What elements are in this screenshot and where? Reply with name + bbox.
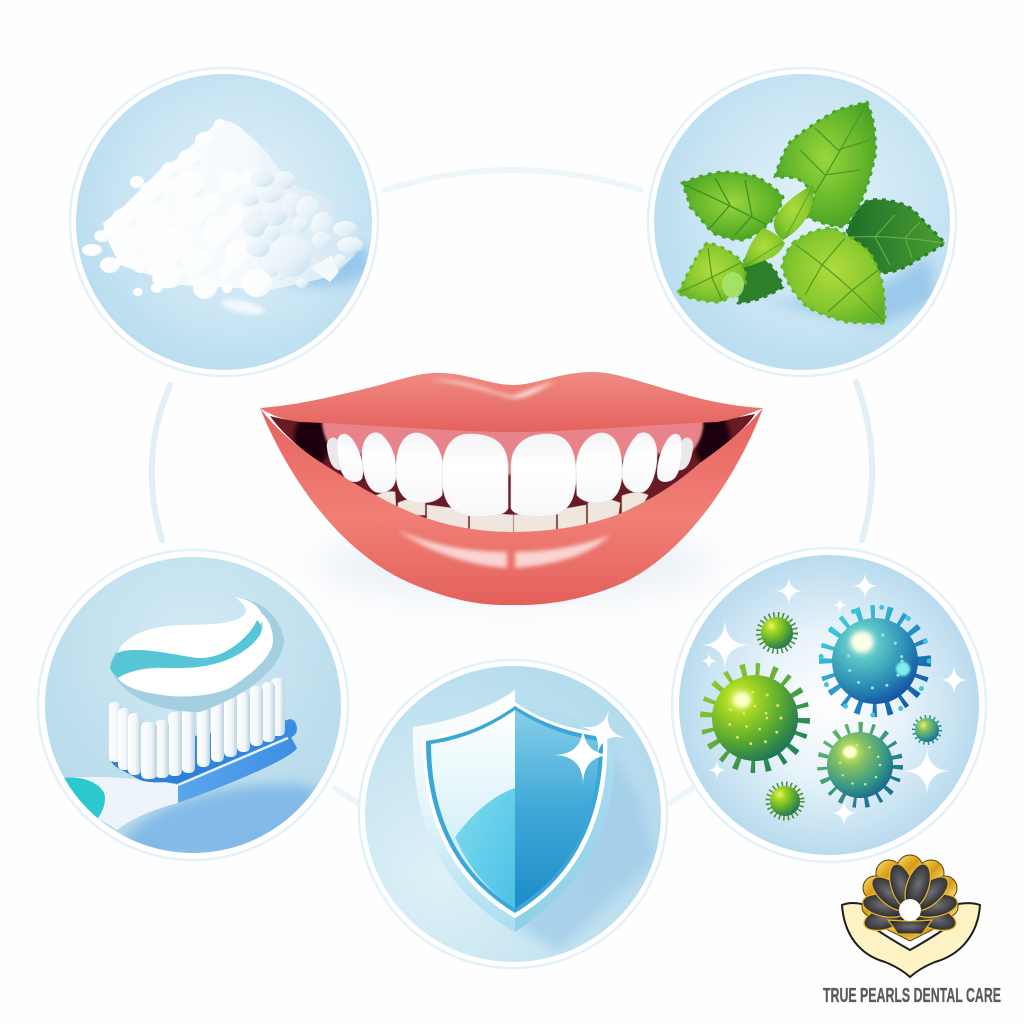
germ: large green — [709, 672, 801, 764]
handle — [62, 777, 178, 830]
leaf: lower left — [678, 243, 745, 302]
lower teeth — [372, 492, 648, 535]
germ: large teal — [821, 607, 929, 715]
mouth shadow — [315, 527, 715, 603]
leaf: small center upper — [774, 185, 814, 240]
leaf: dark back — [738, 257, 783, 303]
logo shell rim — [862, 855, 958, 941]
upper lip — [260, 372, 763, 432]
shield right half — [515, 710, 599, 908]
white rocks, left — [82, 119, 272, 299]
shaded rocks, right — [241, 169, 363, 288]
leaf: bottom center — [782, 228, 885, 323]
water drop — [722, 272, 744, 298]
powder cast shadow — [287, 241, 370, 292]
brush shadow — [121, 778, 318, 853]
gums — [322, 420, 703, 475]
shield left half — [431, 710, 515, 908]
shield shadow — [520, 730, 655, 950]
head highlight — [178, 738, 288, 785]
central smile — [255, 372, 765, 605]
logo hands — [842, 903, 980, 977]
shield right band — [515, 690, 615, 932]
mouth interior — [270, 414, 755, 532]
leaf: small center lower — [742, 228, 785, 268]
germ: medium — [824, 729, 896, 801]
powder surface highlight — [221, 298, 265, 316]
shield blue line — [426, 706, 603, 913]
lower lip highlight left — [398, 530, 507, 568]
sparkles — [699, 572, 969, 827]
logo: True Pearls Dental Care — [823, 855, 1001, 1007]
handle teal grip — [60, 777, 105, 818]
paste teal stripe — [110, 620, 261, 678]
mint shadow — [760, 255, 935, 325]
panel: mint — [648, 68, 956, 376]
lower lip highlight right — [515, 535, 610, 568]
upper lip highlight — [430, 380, 555, 398]
panel: shield — [359, 660, 667, 968]
icon: shield sparkles — [553, 703, 632, 785]
panel: toothpaste — [38, 550, 348, 860]
logo pearl — [899, 899, 921, 921]
panel: powder — [70, 68, 378, 376]
lower lip — [260, 408, 763, 605]
brush neck blue — [178, 735, 297, 803]
paste lower white — [118, 612, 273, 697]
leaf: top — [775, 102, 876, 227]
connecting ring arcs — [152, 170, 872, 803]
shield left lower swoosh — [455, 788, 515, 908]
shield left band — [413, 690, 515, 932]
logo shell petals — [861, 861, 959, 935]
paste base — [110, 597, 284, 712]
toothpaste swirl — [110, 597, 284, 712]
brush head — [111, 719, 297, 784]
leaf: right — [847, 200, 945, 273]
upper teeth — [327, 433, 693, 516]
shield white rim — [423, 702, 607, 918]
mint leaves — [678, 102, 945, 323]
germ: small teal — [914, 717, 940, 743]
paste top white — [117, 597, 263, 658]
leaf: upper left — [682, 172, 783, 240]
bristles — [109, 678, 285, 779]
powder pile — [82, 119, 363, 299]
big rock — [269, 235, 311, 277]
germ: small green top — [759, 615, 795, 651]
triangular rock — [310, 255, 339, 282]
panel: germs — [672, 548, 986, 862]
germ: small green bottom — [768, 784, 802, 818]
